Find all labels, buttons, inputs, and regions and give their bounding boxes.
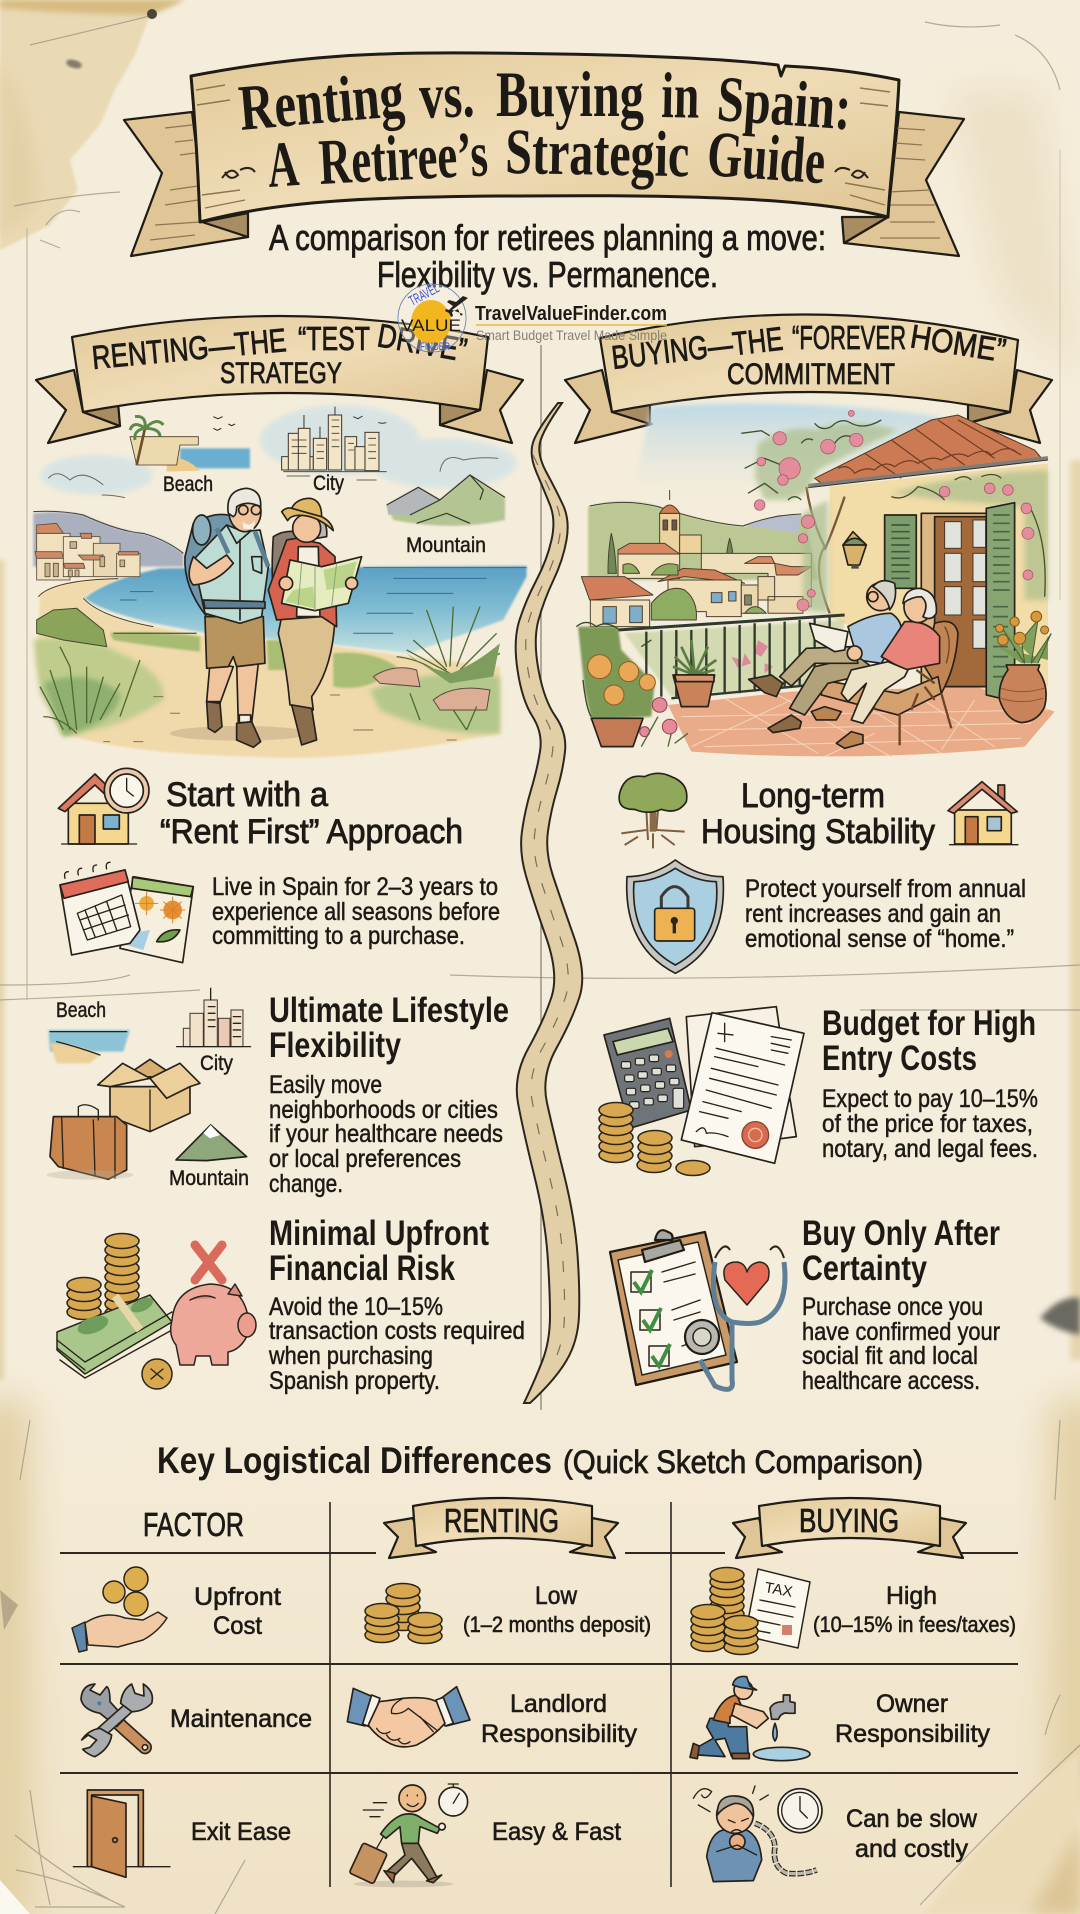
rocks	[373, 668, 490, 710]
comparison table	[60, 1498, 1018, 1887]
village	[581, 490, 811, 627]
title text: vs.	[418, 59, 475, 133]
labels	[56, 999, 249, 1190]
body text	[269, 1071, 503, 1198]
heading: Flexibility	[269, 1026, 401, 1065]
heading: Housing Stability	[701, 813, 935, 851]
table heading	[157, 1440, 923, 1481]
flower planter left	[576, 622, 688, 747]
icon: coins and tax form: TAX	[763, 1579, 794, 1601]
winding road divider	[516, 403, 582, 1403]
right shutter	[986, 503, 1015, 702]
scene labels: Mountain	[406, 534, 486, 557]
title text: Buying	[496, 59, 644, 131]
hills	[588, 502, 818, 580]
mini city	[282, 407, 387, 480]
lantern	[843, 532, 866, 569]
body text: Purchase once you	[802, 1293, 983, 1321]
heading	[269, 991, 509, 1065]
body text	[212, 873, 500, 950]
vine	[741, 410, 1048, 613]
row: upfront cost: (10–15% in fees/taxes)	[813, 1612, 1016, 1637]
icon: plumber at tap	[690, 1676, 810, 1761]
grass strokes	[40, 607, 500, 733]
logo: TravelValueFinder	[398, 279, 667, 353]
body text: Expect to pay 10–15%	[822, 1085, 1038, 1113]
icon group: beach, city, mountain, box, suitcase	[47, 988, 251, 1180]
heading	[269, 1214, 489, 1288]
coastal town	[35, 523, 140, 580]
scene labels: City	[313, 472, 344, 495]
body text: Easily move	[269, 1071, 382, 1099]
heading: Budget for High	[822, 1004, 1036, 1043]
left banner heading	[90, 316, 470, 390]
body text	[268, 1293, 525, 1395]
title text: Guide	[705, 118, 828, 198]
left banner heading: DRIVE”	[375, 316, 470, 369]
icon: runner with suitcase and stopwatch	[349, 1784, 468, 1887]
icon: crossed wrenches	[81, 1684, 152, 1757]
heading: Start with a	[166, 776, 328, 814]
factor label: Maintenance	[170, 1705, 312, 1733]
body text: or local preferences	[269, 1145, 461, 1173]
buying value: Owner	[876, 1690, 948, 1718]
logo: TravelValueFinder: TRAVEL	[406, 279, 442, 309]
right banner heading: BUYING—THE	[610, 320, 785, 376]
renting value: Low	[535, 1582, 578, 1610]
title text: Retiree’s	[317, 118, 490, 199]
body text: transaction costs required	[269, 1317, 525, 1345]
title text: in	[661, 60, 700, 133]
BUYING header banner: BUYING	[799, 1502, 899, 1539]
illustration: couple on a terrace above a village	[576, 403, 1055, 757]
icon: clipboard and stethoscope	[610, 1230, 785, 1389]
man hiker	[185, 488, 268, 747]
title text: Spain:	[715, 63, 854, 144]
icon: shield with padlock	[627, 860, 723, 973]
body text: if your healthcare needs	[269, 1120, 503, 1148]
icon: house with clock	[58, 768, 149, 844]
body text: Spanish property.	[269, 1367, 440, 1395]
heading: Entry Costs	[822, 1039, 977, 1078]
icon: house	[948, 782, 1018, 845]
FACTOR header: FACTOR	[143, 1506, 244, 1543]
icon: calculator, documents, coins	[604, 1007, 804, 1163]
factor label: Upfront	[194, 1583, 281, 1611]
logo: TravelValueFinder: Smart Budget Travel Made Simple	[476, 327, 667, 343]
body text	[802, 1293, 1000, 1395]
RENTING header banner: RENTING	[444, 1502, 559, 1539]
right section banner	[565, 314, 1052, 443]
icon: tree	[619, 773, 687, 848]
right banner heading: “FOREVER	[792, 319, 906, 356]
body text: of the price for taxes,	[822, 1110, 1033, 1138]
right banner heading: HOME”	[908, 317, 1009, 369]
logo: TravelValueFinder: TravelValueFinder.com	[475, 303, 667, 325]
distant mountain	[33, 512, 183, 567]
heading	[160, 776, 463, 851]
woman hiker	[268, 498, 362, 745]
heading: Long-term	[741, 777, 885, 815]
heading: Buy Only After	[802, 1214, 1000, 1253]
icon: coin stacks low	[365, 1584, 442, 1644]
mini beach	[130, 416, 250, 472]
sky washes	[40, 405, 517, 495]
body text: emotional sense of “home.”	[745, 925, 1014, 953]
table heading: (Quick Sketch Comparison)	[563, 1444, 923, 1480]
body text: healthcare access.	[802, 1367, 980, 1395]
icon: handshake	[347, 1687, 470, 1747]
row: maintenance: Responsibility	[835, 1720, 990, 1748]
heading	[701, 777, 935, 851]
row: maintenance	[81, 1676, 990, 1761]
row: upfront cost	[72, 1567, 1016, 1654]
left point 2: Lifestyle Flexibility	[47, 988, 509, 1198]
seated woman	[811, 588, 940, 748]
icon: hand with coins	[72, 1567, 167, 1652]
title text	[236, 59, 854, 202]
BUYING header banner	[733, 1498, 966, 1558]
heading: Certainty	[802, 1249, 927, 1288]
title text: A	[265, 128, 301, 202]
door	[921, 513, 988, 687]
subtitle: A comparison for retirees planning a move:	[269, 217, 826, 258]
grasses	[33, 638, 164, 735]
left banner heading: RENTING—THE	[90, 321, 288, 376]
title banner	[124, 53, 964, 256]
left point 1: Rent First	[58, 768, 500, 963]
factor label: Exit Ease	[191, 1818, 291, 1846]
seated man	[749, 581, 901, 733]
icon: worried man with clock and chain	[693, 1786, 822, 1882]
heading: Financial Risk	[269, 1249, 455, 1288]
scene labels: Beach	[163, 473, 213, 496]
centre vertical divider	[540, 345, 542, 1410]
title text: Renting	[236, 59, 407, 145]
icon: open door	[73, 1790, 170, 1877]
labels: Mountain	[169, 1167, 249, 1190]
buying value: High	[886, 1582, 937, 1610]
illustration: couple hiking on a Spanish coast	[33, 405, 527, 758]
heading: Ultimate Lifestyle	[269, 991, 509, 1030]
heading: Minimal Upfront	[269, 1214, 489, 1253]
left section banner	[36, 316, 523, 443]
icon: coins and tax form	[691, 1568, 810, 1654]
renting value: Easy & Fast	[492, 1818, 621, 1846]
icon: calendars	[60, 862, 193, 963]
heading	[822, 1004, 1036, 1078]
body text: have confirmed your	[802, 1318, 1000, 1346]
body text: Protect yourself from annual	[745, 875, 1026, 903]
body text: Avoid the 10–15%	[269, 1293, 443, 1321]
buying value: Can be slow	[846, 1805, 978, 1833]
left shutter	[885, 515, 916, 588]
row: upfront cost: (1–2 months deposit)	[463, 1612, 651, 1637]
body text: notary, and legal fees.	[822, 1135, 1038, 1163]
sea	[83, 566, 527, 653]
body text: social fit and local	[802, 1342, 978, 1370]
sky	[635, 403, 941, 513]
row: maintenance: Responsibility	[481, 1720, 637, 1748]
row: upfront cost: Cost	[213, 1612, 262, 1640]
RENTING header banner	[384, 1498, 618, 1558]
sandy path	[37, 578, 500, 758]
body text	[745, 875, 1026, 953]
balcony railing	[618, 615, 845, 698]
right banner heading: COMMITMENT	[727, 358, 895, 391]
logo: TravelValueFinder: VALUE	[401, 316, 461, 335]
body text: when purchasing	[268, 1342, 433, 1370]
heading	[802, 1214, 1000, 1288]
body text: neighborhoods or cities	[269, 1096, 498, 1124]
pot with spiky plant	[673, 640, 716, 707]
logo: TravelValueFinder: FINDER	[420, 341, 450, 353]
subtitle	[269, 217, 826, 295]
row: exit ease: and costly	[855, 1835, 969, 1863]
body text: Live in Spain for 2–3 years to	[212, 873, 498, 901]
heading: “Rent First” Approach	[160, 813, 463, 851]
left banner heading: STRATEGY	[220, 357, 342, 390]
body text: change.	[269, 1170, 343, 1198]
wicker chair	[821, 621, 958, 745]
body text: experience all seasons before	[212, 898, 500, 926]
right point 2: Entry Costs	[599, 1004, 1038, 1176]
body text	[822, 1085, 1038, 1163]
right point 3: Buy After Certainty	[610, 1214, 1000, 1395]
body text: committing to a purchase.	[212, 922, 465, 950]
labels: City	[200, 1052, 233, 1075]
table heading: Key Logistical Differences	[157, 1440, 552, 1481]
scene labels	[163, 472, 486, 557]
left point 3: Upfront Risk	[57, 1214, 525, 1395]
labels: Beach	[56, 999, 106, 1022]
icon: coins, cash, piggy bank, X	[57, 1234, 256, 1389]
house wall	[830, 463, 1048, 690]
floor	[668, 687, 1055, 756]
right banner heading	[610, 317, 1009, 391]
right point 1: Housing Stability	[619, 773, 1026, 973]
mini mountains	[387, 475, 505, 526]
subtitle: Flexibility vs. Permanence.	[377, 254, 718, 295]
title text: Strategic	[505, 116, 690, 191]
renting value: Landlord	[510, 1690, 607, 1718]
terracotta vase with flowers	[996, 611, 1051, 723]
left banner heading: “TEST	[298, 320, 370, 357]
row: exit ease	[73, 1784, 978, 1887]
body text: rent increases and gain an	[745, 900, 1001, 928]
roof	[815, 415, 1043, 483]
